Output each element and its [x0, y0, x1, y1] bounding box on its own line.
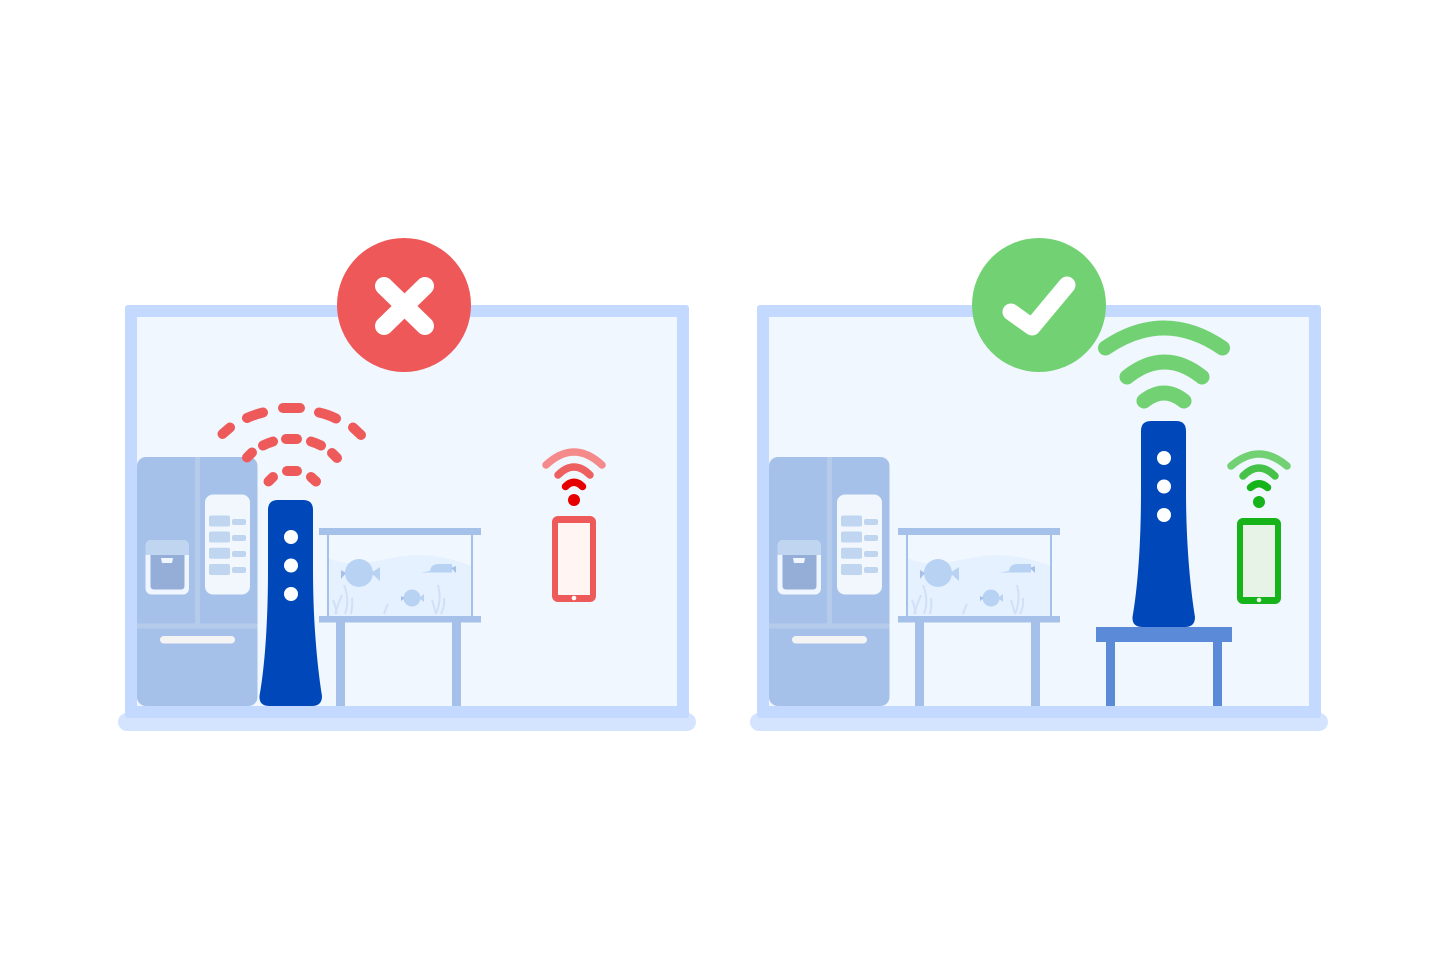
refrigerator [137, 457, 258, 706]
refrigerator [769, 457, 890, 706]
router on floor [259, 500, 322, 706]
weak dashed wifi signal [222, 408, 361, 482]
panel: bad placement [118, 238, 696, 731]
phone with strong signal [1231, 454, 1287, 604]
aquarium on table [319, 528, 481, 706]
icon: red cross badge [337, 238, 471, 372]
strong wifi signal [1106, 328, 1222, 401]
room frame [750, 305, 1328, 731]
router on table [1132, 421, 1195, 627]
phone with poor signal [546, 452, 602, 602]
raised table [1096, 627, 1232, 706]
icon: green check badge [972, 238, 1106, 372]
room frame [118, 305, 696, 731]
panel: good placement [750, 238, 1328, 731]
aquarium on table [898, 528, 1060, 706]
